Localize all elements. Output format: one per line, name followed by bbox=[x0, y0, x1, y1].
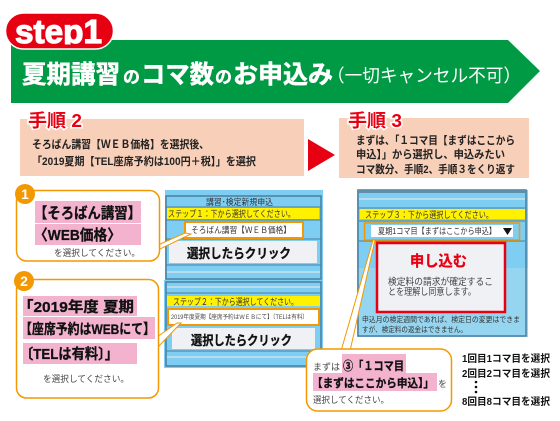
callout 1: 1 bbox=[21, 186, 29, 202]
callout 3: 選択してください。 bbox=[313, 394, 389, 405]
arrow: red triangle bbox=[308, 139, 335, 171]
callout 3 bbox=[306, 349, 452, 411]
text block: repeat list: 2回目2コマ目を選択 bbox=[462, 367, 550, 380]
step badge: step1 bbox=[15, 13, 102, 50]
panel: screen step 1: そろばん講習【ＷＥＢ価格】 bbox=[191, 225, 291, 235]
panel: screen step 3: 検定料の請求が確定するこ bbox=[388, 276, 493, 288]
panel: procedure 3: 手順 3 bbox=[348, 111, 402, 131]
title banner bbox=[11, 40, 540, 103]
callout 1: を選択してください。 bbox=[54, 247, 140, 258]
callout 2 bbox=[14, 271, 158, 398]
panel: screen step 2: 選択したらクリック bbox=[191, 333, 292, 348]
callout 2: 2 bbox=[20, 273, 28, 289]
panel: screen step 3: 申し込む bbox=[410, 253, 467, 270]
callout 2: を選択してください。 bbox=[43, 373, 129, 384]
panel: screen step 1: 選択したらクリック bbox=[187, 246, 291, 261]
panel: procedure 2: 手順 2 bbox=[28, 111, 82, 131]
title banner: コマ数 bbox=[141, 61, 214, 89]
panel: screen step 3 bbox=[357, 190, 528, 337]
callout 1: 【そろばん講習】 bbox=[34, 204, 141, 222]
title banner: お申込み bbox=[233, 61, 333, 89]
callout: connector 2 bbox=[157, 323, 181, 348]
callout 1: 〈WEB価格〉 bbox=[34, 226, 121, 244]
panel: procedure 2: 「2019夏期【TEL座席予約は100円＋税】」を選択 bbox=[32, 154, 256, 168]
callout 2: 【座席予約はWEBにて】 bbox=[20, 321, 155, 337]
panel: procedure 3: まずは、「１コマ目【まずはここから bbox=[356, 133, 515, 147]
title banner: の bbox=[123, 68, 140, 87]
panel: screen step 1 bbox=[165, 190, 323, 281]
panel: screen step 1: ステップ１：下から選択してください。 bbox=[168, 208, 295, 219]
title banner: の bbox=[215, 68, 232, 87]
panel: screen step 2: 2019年度夏期【座席予約はＷＥＢにて】〔TELは有料〕 bbox=[171, 313, 308, 321]
title banner: 夏期講習 bbox=[22, 61, 120, 89]
panel: procedure 2: そろばん講習【ＷＥＢ価格】を選択後、 bbox=[32, 137, 209, 151]
panel: screen step 3: 申込月の検定週間であれば、検定日の変更はできま bbox=[362, 314, 520, 324]
callout: connector 1 bbox=[158, 233, 191, 250]
panel: procedure 2 bbox=[20, 111, 304, 176]
panel: screen step 3: すが、検定料の返金はできません。 bbox=[362, 324, 467, 334]
panel: procedure 3: 申込】」から選択し、申込みたい bbox=[356, 147, 505, 161]
callout 2: 「2019年度 夏期 bbox=[18, 298, 134, 316]
callout 1 bbox=[15, 184, 160, 261]
panel: screen step 2: ステップ２：下から選択してください。 bbox=[173, 296, 298, 307]
panel: screen step 3: 夏期1コマ目【まずはここから申込】 bbox=[378, 226, 496, 236]
panel: screen step 3: ステップ３：下から選択してください。 bbox=[365, 209, 493, 220]
text block: repeat list: 8回目8コマ目を選択 bbox=[462, 395, 550, 408]
panel: procedure 3: コマ数分、手順2、手順３をくり返す bbox=[356, 162, 515, 176]
panel: screen step 1: 講習･検定新規申込 bbox=[206, 197, 273, 207]
panel: procedure 3 bbox=[339, 111, 529, 178]
title banner: （一切キャンセル不可） bbox=[327, 66, 521, 86]
panel: screen step 2 bbox=[164, 280, 323, 368]
callout 3: ③「１コマ目 bbox=[343, 359, 404, 373]
callout 3: 【まずはここから申込】」 bbox=[312, 376, 434, 390]
text block: repeat list: 1回目1コマ目を選択 bbox=[462, 352, 550, 365]
text block: repeat list bbox=[462, 352, 550, 408]
callout 3: まずは bbox=[313, 362, 340, 372]
callout 2: 〔TELは有料〕」 bbox=[20, 346, 118, 363]
panel: screen step 3: とを理解し同意します。 bbox=[388, 286, 476, 298]
callout 3: を bbox=[438, 379, 447, 389]
callout: connector 3 bbox=[341, 240, 375, 351]
